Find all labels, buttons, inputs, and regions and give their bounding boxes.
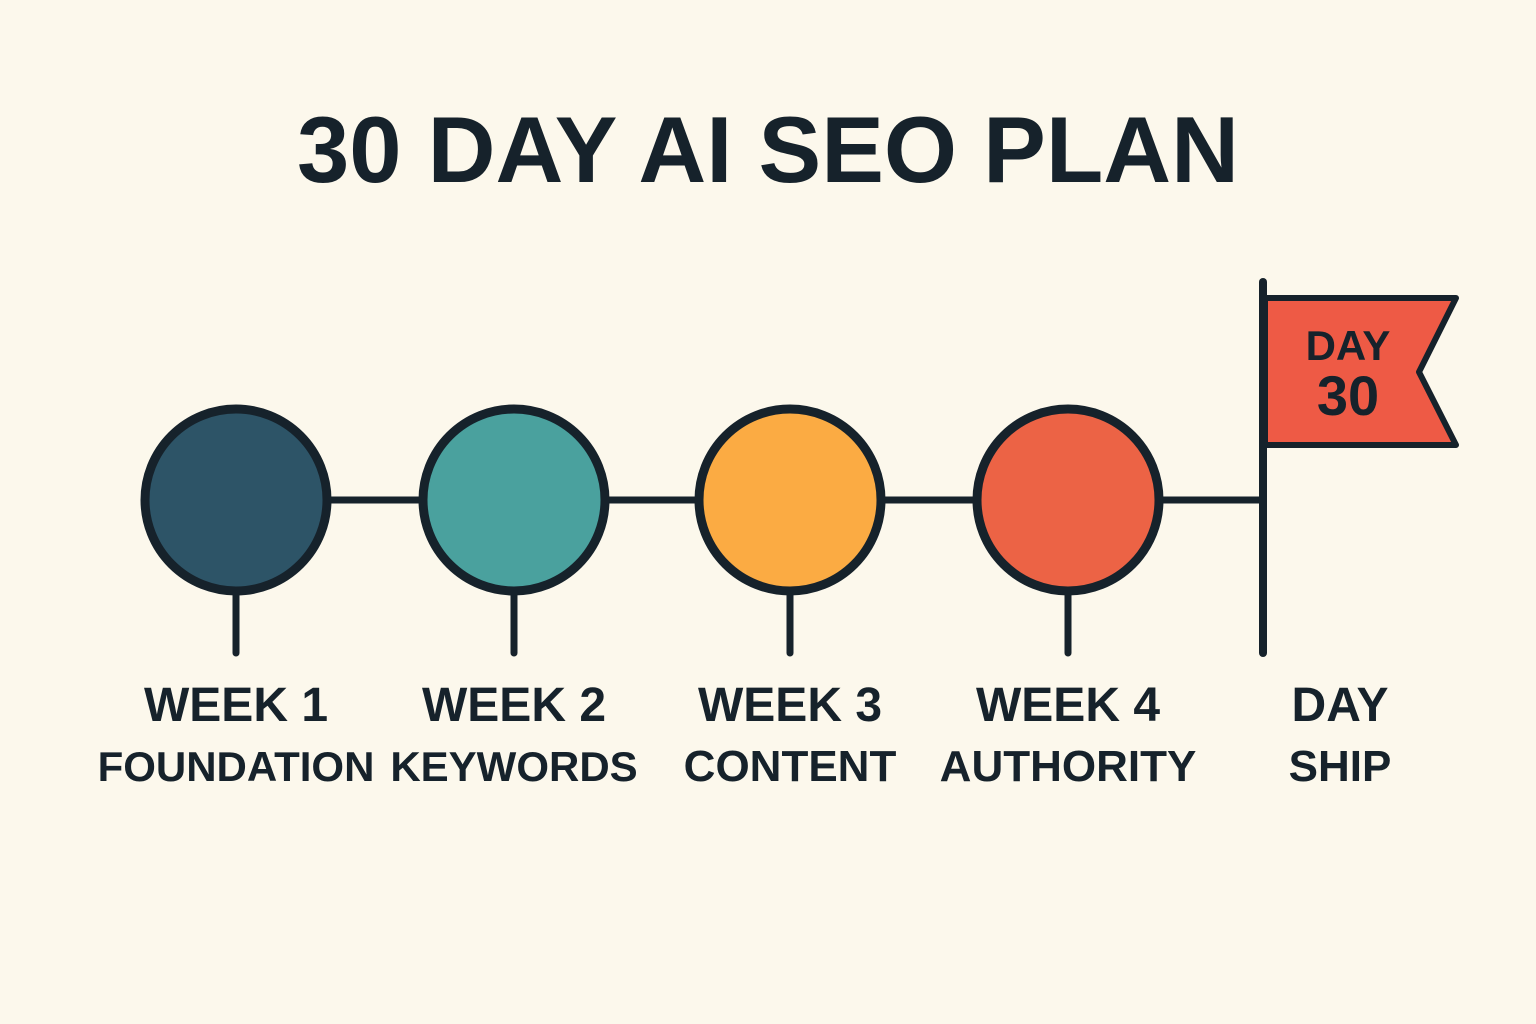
flag: day 30	[1263, 282, 1456, 653]
flag: day 30: DAY	[1306, 322, 1390, 369]
label: week 3: WEEK 3	[698, 679, 882, 732]
stems	[236, 590, 1068, 653]
label: day ship: DAY	[1292, 679, 1388, 732]
label: week 3	[684, 679, 896, 791]
label: day ship: SHIP	[1289, 742, 1391, 791]
label: week 1: WEEK 1	[144, 679, 328, 732]
label: week 2	[390, 679, 638, 790]
label: day ship	[1289, 679, 1391, 791]
label: week 3: CONTENT	[684, 742, 896, 791]
circle: week 4	[977, 409, 1159, 591]
label: week 4: AUTHORITY	[940, 742, 1196, 791]
connector line	[320, 496, 1262, 504]
label: week 1: FOUNDATION	[98, 743, 374, 790]
label: week 4: WEEK 4	[976, 679, 1160, 732]
circle: week 1	[145, 409, 327, 591]
title: 30 DAY AI SEO PLAN	[297, 97, 1239, 202]
label: week 1	[98, 679, 374, 790]
flag: day 30: 30	[1317, 364, 1379, 427]
label: week 2: KEYWORDS	[390, 743, 638, 790]
label: week 2: WEEK 2	[422, 679, 606, 732]
circle: week 3	[699, 409, 881, 591]
label: week 4	[940, 679, 1196, 791]
circle: week 2	[423, 409, 605, 591]
